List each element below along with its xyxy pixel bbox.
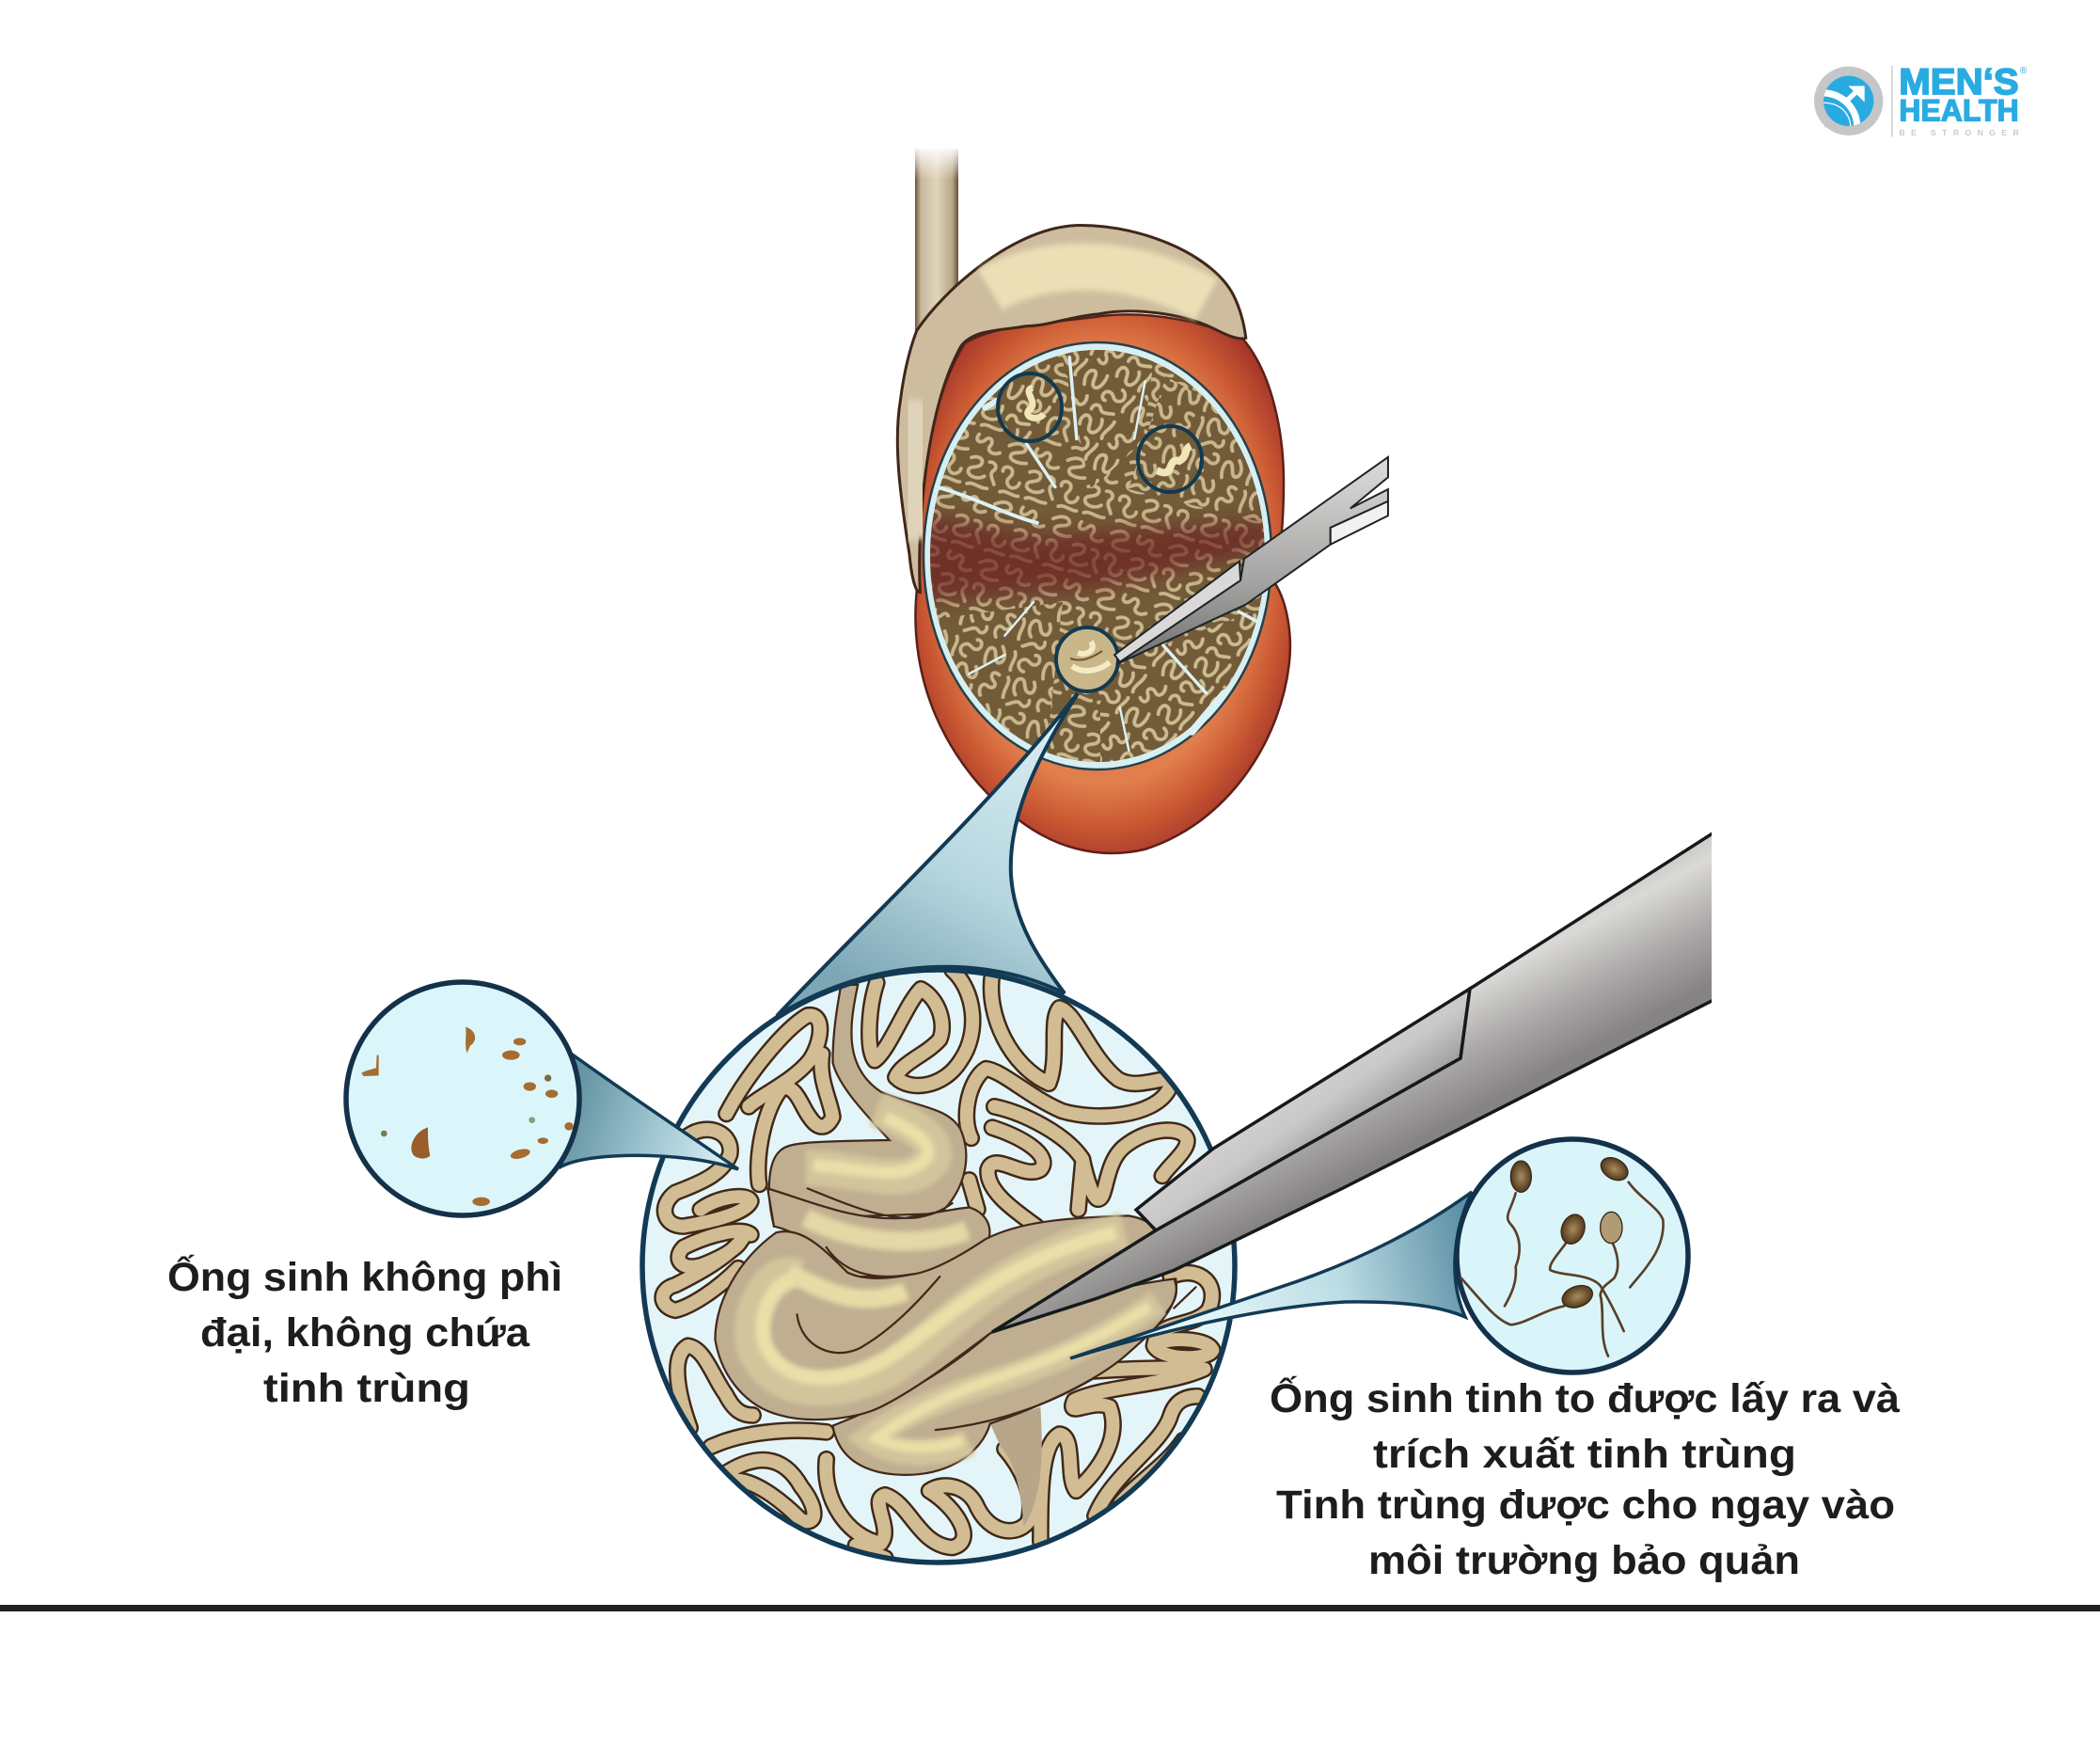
bottom rule <box>0 1605 2100 1611</box>
logo divider <box>1891 66 1893 136</box>
enlarged tubule mass <box>715 985 1196 1527</box>
coiled thin tubules <box>663 970 1212 1558</box>
wedge to empty tubule <box>561 1055 738 1169</box>
crease lines <box>797 1188 1196 1430</box>
right caption: trích xuất tinh trùng <box>1373 1432 1796 1477</box>
logo wordmark: HEALTH <box>1899 93 2019 127</box>
circle <box>1457 1139 1688 1372</box>
biopsy circle: upper left <box>998 373 1062 441</box>
small forceps <box>1114 457 1388 664</box>
logo wordmark: MEN‘S <box>1899 61 2019 103</box>
debris specks <box>361 1027 574 1206</box>
logo wordmark <box>1899 61 2028 137</box>
lower tube <box>832 1278 1176 1475</box>
forceps upper jaw <box>1136 989 1470 1230</box>
lower-left lobe and long tube <box>715 1215 1158 1420</box>
logo wordmark: ® <box>2020 66 2028 76</box>
left caption <box>167 1254 562 1411</box>
right caption: Ống sinh tinh to được lấy ra và <box>1270 1375 1901 1421</box>
spermatic cord <box>915 149 958 337</box>
epididymis <box>897 225 1246 593</box>
dark medial band <box>917 513 1270 602</box>
right caption: môi trường bảo quản <box>1368 1538 1800 1583</box>
left caption: Ống sinh không phì <box>167 1254 562 1300</box>
middle lobe <box>767 1188 989 1277</box>
callout: sperm circle <box>1070 1139 1688 1372</box>
tunica (red outer layer) <box>915 314 1290 853</box>
sperm cells <box>1461 1153 1664 1356</box>
right caption: Tinh trùng được cho ngay vào <box>1276 1483 1895 1528</box>
magnified circle outline <box>642 970 1235 1563</box>
seminiferous tissue disc <box>917 339 1279 771</box>
upper lobe <box>769 985 966 1227</box>
left caption: đại, không chứa <box>200 1310 530 1356</box>
biopsy circle: extraction site <box>1056 627 1118 691</box>
magnified view of tubules <box>642 970 1235 1563</box>
logo: Men's Health <box>1814 61 2028 137</box>
left caption: tinh trùng <box>263 1366 470 1411</box>
right caption <box>1270 1375 1901 1583</box>
tail <box>990 1407 1042 1527</box>
pale septa <box>937 357 1256 751</box>
callout wedge: testis to magnified view <box>777 693 1078 1016</box>
testis cross-section <box>897 146 1388 853</box>
logo emblem <box>1814 67 1883 135</box>
wedge to sperm circle <box>1070 1192 1472 1358</box>
forceps body <box>992 832 1715 1332</box>
biopsy circle: upper right <box>1138 426 1202 492</box>
large forceps <box>992 823 1721 1332</box>
callout: empty tubule circle <box>346 982 738 1215</box>
circle with debris <box>346 982 579 1215</box>
logo wordmark: BE STRONGER <box>1899 128 2019 137</box>
